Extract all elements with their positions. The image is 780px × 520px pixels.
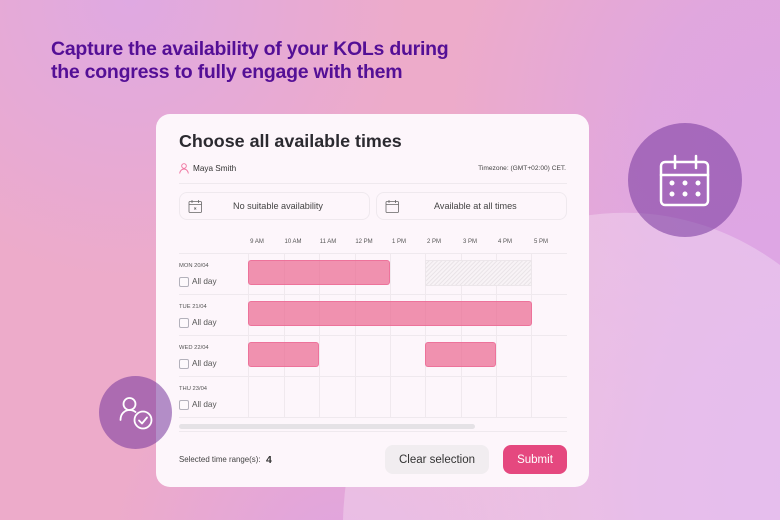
hour labels: 10 AM bbox=[284, 239, 302, 245]
selected range: Wednesday afternoon bbox=[425, 342, 496, 367]
icon: user check badge bbox=[99, 376, 172, 449]
user name: Maya Smith bbox=[193, 164, 236, 173]
hour labels: 1 PM bbox=[392, 239, 406, 245]
row: Thursday: All day bbox=[192, 400, 217, 408]
scrollbar bbox=[179, 424, 475, 429]
row: Monday bbox=[179, 263, 217, 287]
hour labels: 5 PM bbox=[534, 239, 548, 245]
row: Monday: MON 20/04 bbox=[179, 263, 209, 269]
hour labels: 12 PM bbox=[355, 239, 373, 245]
button: no suitable availability bbox=[179, 192, 370, 220]
calendar glyph bbox=[660, 154, 710, 206]
user check glyph bbox=[120, 397, 152, 430]
row: Tuesday: TUE 21/04 bbox=[179, 304, 207, 310]
count label: Selected time range(s): bbox=[179, 455, 261, 464]
hour labels bbox=[250, 238, 548, 245]
row: Wednesday: WED 22/04 bbox=[179, 345, 209, 351]
button: clear selection: Clear selection bbox=[399, 454, 475, 466]
icon: calendar bbox=[386, 200, 399, 213]
row: Tuesday: All day bbox=[192, 318, 217, 326]
title: the congress to fully engage with them bbox=[51, 60, 402, 82]
row: Wednesday: All day bbox=[192, 358, 217, 368]
panel: availability card bbox=[156, 114, 589, 487]
button: clear selection bbox=[385, 445, 489, 474]
hour labels: 11 AM bbox=[320, 239, 336, 245]
button label: No suitable availability bbox=[233, 201, 323, 211]
icon: user bbox=[179, 163, 189, 174]
selected range: Tuesday bbox=[248, 301, 532, 326]
selected range: Wednesday morning bbox=[248, 342, 319, 367]
hour labels: 2 PM bbox=[427, 239, 441, 245]
hour labels: 3 PM bbox=[463, 239, 477, 245]
unavailable hatched range bbox=[426, 260, 531, 286]
row: Monday: All day bbox=[192, 276, 217, 286]
count value: 4 bbox=[266, 454, 272, 466]
hour labels: 9 AM bbox=[250, 239, 264, 245]
icon: calendar badge bbox=[628, 123, 742, 237]
title: Capture the availability of your KOLs during bbox=[51, 38, 448, 60]
button: submit: Submit bbox=[517, 454, 553, 466]
row: Wednesday bbox=[179, 345, 217, 369]
title bbox=[51, 38, 448, 82]
button: available at all times bbox=[376, 192, 567, 220]
selected range: Monday bbox=[248, 260, 390, 285]
card heading: Choose all available times bbox=[179, 131, 402, 151]
icon: calendar with x bbox=[188, 200, 202, 213]
row: Tuesday bbox=[179, 304, 217, 328]
button label: Available at all times bbox=[434, 201, 517, 211]
selected range count bbox=[179, 454, 272, 466]
timezone: Timezone: (GMT+02:00) CET. bbox=[478, 165, 566, 172]
hour labels: 4 PM bbox=[498, 239, 512, 245]
row: Thursday bbox=[179, 386, 217, 410]
button: submit bbox=[503, 445, 567, 474]
row: Thursday: THU 23/04 bbox=[179, 386, 207, 392]
